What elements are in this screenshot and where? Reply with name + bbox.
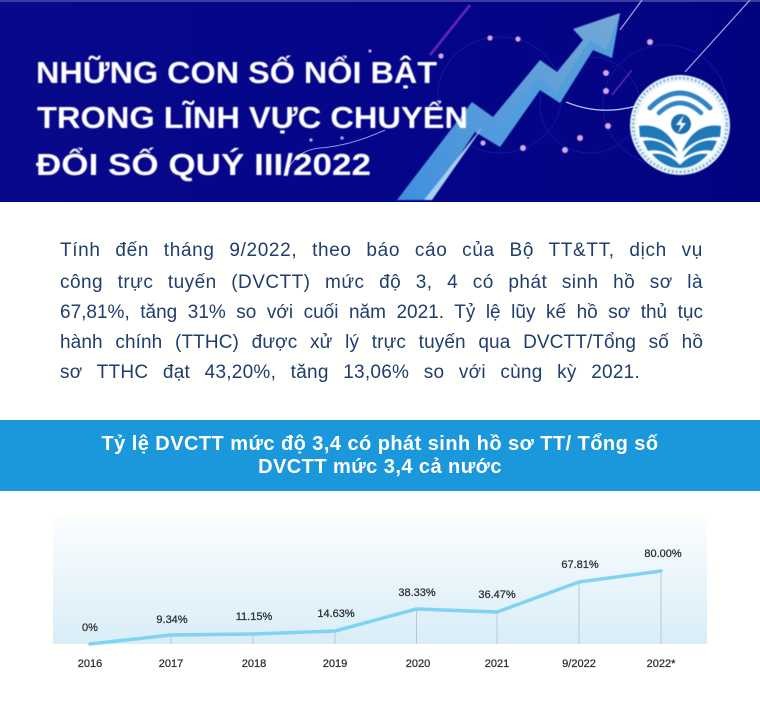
axis labels: 2018 — [242, 658, 266, 670]
axis labels: 2016 — [78, 658, 102, 670]
axis labels: 2019 — [323, 658, 347, 670]
icon: ministry logo — [630, 75, 730, 175]
icon: rising arrow — [397, 13, 620, 200]
intro paragraph: 67,81%, tăng 31% so với cuối năm 2021. Tỷ lệ lũy kế hồ sơ thủ tục — [60, 302, 703, 323]
intro paragraph: hành chính (TTHC) được xử lý trực tuyến qua DVCTT/Tổng số hồ — [60, 332, 703, 353]
chart title band: DVCTT mức 3,4 cả nước — [258, 456, 502, 478]
title: NHỮNG CON SỐ NỔI BẬT — [36, 54, 437, 90]
intro paragraph: công trực tuyến (DVCTT) mức độ 3, 4 có phát sinh hồ sơ là — [60, 272, 703, 293]
axis labels: 2020 — [406, 658, 430, 670]
chart title band — [0, 420, 760, 491]
data labels: 14.63% — [317, 608, 355, 620]
axis labels: 2021 — [485, 658, 509, 670]
decorative dots — [309, 35, 653, 153]
axis labels: 2017 — [159, 658, 183, 670]
header banner — [0, 0, 760, 202]
line chart — [53, 532, 707, 670]
data labels: 9.34% — [156, 614, 188, 626]
data labels: 38.33% — [398, 587, 436, 599]
data labels: 11.15% — [236, 611, 272, 623]
data labels: 0% — [82, 622, 98, 634]
title — [36, 54, 468, 182]
intro paragraph: Tính đến tháng 9/2022, theo báo cáo của Bộ TT&TT, dịch vụ — [60, 240, 703, 261]
chart title band: Tỷ lệ DVCTT mức độ 3,4 có phát sinh hồ sơ TT/ Tổng số — [101, 433, 659, 455]
title: ĐỔI SỐ QUÝ III/2022 — [36, 146, 371, 182]
axis labels: 2022* — [647, 658, 676, 670]
data labels: 80.00% — [644, 548, 682, 560]
title: TRONG LĨNH VỰC CHUYỂN — [37, 100, 468, 135]
data labels: 36.47% — [478, 589, 516, 601]
data labels — [82, 548, 682, 634]
axis labels — [78, 658, 676, 670]
data line — [90, 571, 661, 644]
axis labels: 9/2022 — [562, 658, 596, 670]
intro paragraph: sơ TTHC đạt 43,20%, tăng 13,06% so với cùng kỳ 2021. — [60, 362, 640, 383]
data labels: 67.81% — [561, 559, 599, 571]
intro paragraph — [60, 240, 703, 383]
